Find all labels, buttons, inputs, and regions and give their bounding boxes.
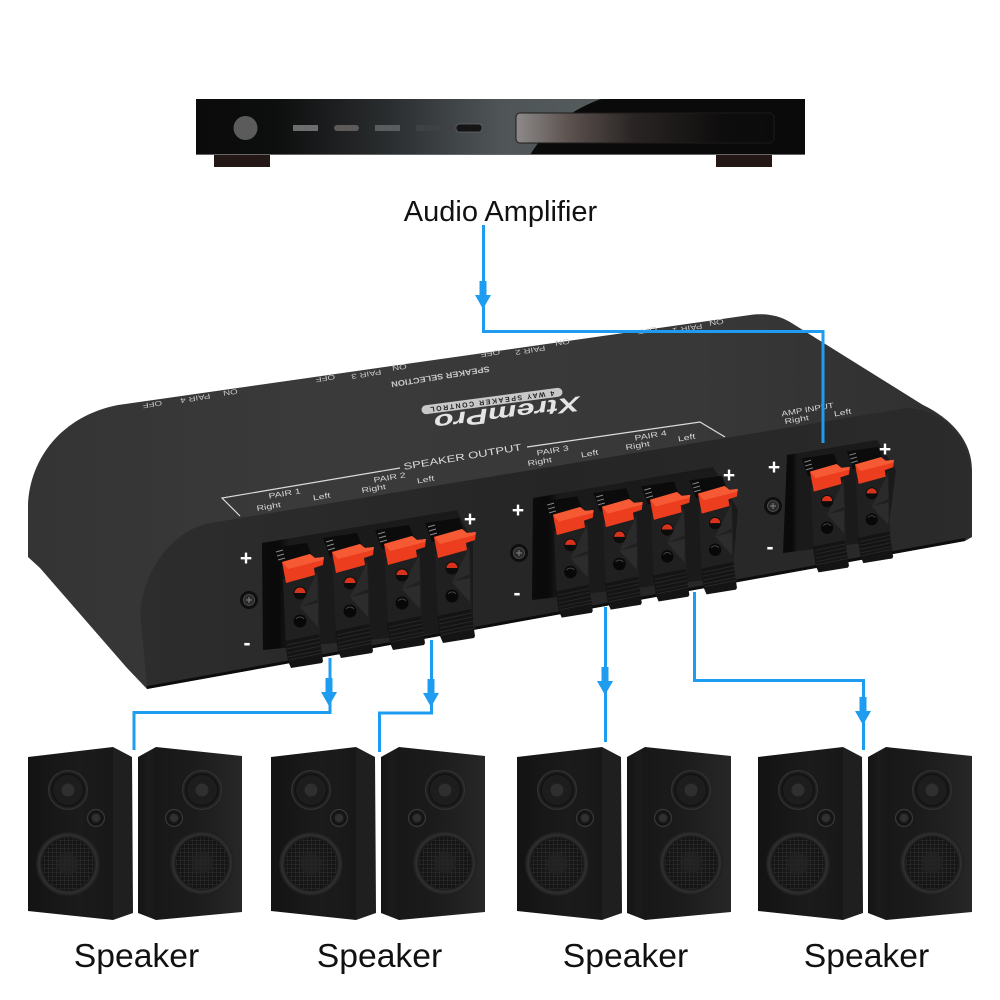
control labels on top panel: PAIR 2 <box>514 344 546 357</box>
polarity marks and screws: + <box>768 456 780 479</box>
speaker output frame and labels: Left <box>416 474 435 485</box>
speaker output frame and labels: PAIR 4 <box>634 429 667 442</box>
speaker output frame and labels: AMP INPUT <box>781 401 835 418</box>
control labels on top panel: OFF <box>637 325 658 336</box>
polarity marks and screws: + <box>512 499 524 522</box>
polarity marks and screws: + <box>464 508 476 531</box>
device front face <box>140 408 971 686</box>
wire: pair 2 to speakers <box>380 640 439 752</box>
brand logo: 4 WAY SPEAKER CONTROL <box>429 389 555 412</box>
wire: pair 4 to speakers <box>694 592 871 750</box>
control labels on top panel: ON <box>391 362 407 373</box>
terminal block: speaker pairs 3 and 4 <box>532 467 738 618</box>
speaker output frame and labels: PAIR 3 <box>536 444 569 457</box>
control labels on top panel: ON <box>554 337 570 348</box>
speaker pair 3 <box>517 747 731 920</box>
control labels on top panel: PAIR 4 <box>179 392 211 405</box>
speaker output frame and labels: Left <box>312 491 331 502</box>
amplifier feet <box>214 154 772 167</box>
control labels on top panel: SPEAKER SELECTION <box>391 364 490 389</box>
speaker output frame and labels: Left <box>833 407 852 418</box>
polarity marks and screws: - <box>766 536 774 559</box>
wire: amplifier to amp input <box>475 225 823 443</box>
speaker output frame and labels: Right <box>527 455 553 468</box>
control labels on top panel: ON <box>222 387 238 398</box>
amplifier body <box>196 99 805 155</box>
polarity marks and screws: + <box>879 438 891 461</box>
control labels on top panel: OFF <box>142 399 163 410</box>
label: speaker 1: Speaker <box>74 937 199 975</box>
polarity marks and screws: + <box>723 464 735 487</box>
speaker pair 2 <box>271 747 485 920</box>
polarity marks and screws <box>240 438 891 655</box>
audio amplifier illustration <box>196 99 805 167</box>
wire: pair 3 to speakers <box>597 607 613 742</box>
label: speaker 2: Speaker <box>317 937 442 975</box>
speaker output frame and labels: Right <box>256 500 282 513</box>
wire: pair 1 to speakers <box>134 658 337 750</box>
polarity marks and screws: - <box>244 632 250 655</box>
speaker output frame and labels <box>222 401 852 516</box>
speaker output frame and labels: PAIR 1 <box>268 487 301 500</box>
speaker output frame and labels: PAIR 2 <box>373 471 406 484</box>
label: audio amplifier: Audio Amplifier <box>404 196 598 228</box>
control labels on top panel: OFF <box>480 348 501 359</box>
speaker output frame and labels: Right <box>625 439 651 452</box>
speaker output frame and labels: Left <box>677 432 696 443</box>
speaker output frame and labels: Right <box>784 413 810 426</box>
control labels on top panel: PAIR 3 <box>350 368 382 381</box>
polarity marks and screws: - <box>514 582 520 605</box>
label: speaker 4: Speaker <box>804 937 929 975</box>
control labels on top panel: PAIR 1 <box>671 322 703 335</box>
speaker output frame and labels: Right <box>361 482 387 495</box>
polarity marks and screws: + <box>240 547 252 570</box>
speaker pair 1 <box>28 747 242 920</box>
control labels on top panel: OFF <box>315 373 336 384</box>
speaker selector device <box>28 314 972 689</box>
amplifier buttons <box>293 124 482 132</box>
label: speaker 3: Speaker <box>563 937 688 975</box>
amplifier display <box>516 113 774 143</box>
control labels on top panel <box>142 317 724 410</box>
terminal block: speaker pairs 1 and 2 <box>262 510 476 668</box>
amplifier power knob <box>234 116 258 140</box>
device top and left surface <box>28 314 972 689</box>
speaker output frame and labels: Left <box>580 448 599 459</box>
control labels on top panel: ON <box>708 317 724 328</box>
brand logo <box>421 387 583 433</box>
terminal block: amp input <box>783 440 896 572</box>
speaker output frame and labels: SPEAKER OUTPUT <box>403 443 522 472</box>
brand logo: XtremPro <box>432 391 583 433</box>
speaker pair 4 <box>758 747 972 920</box>
